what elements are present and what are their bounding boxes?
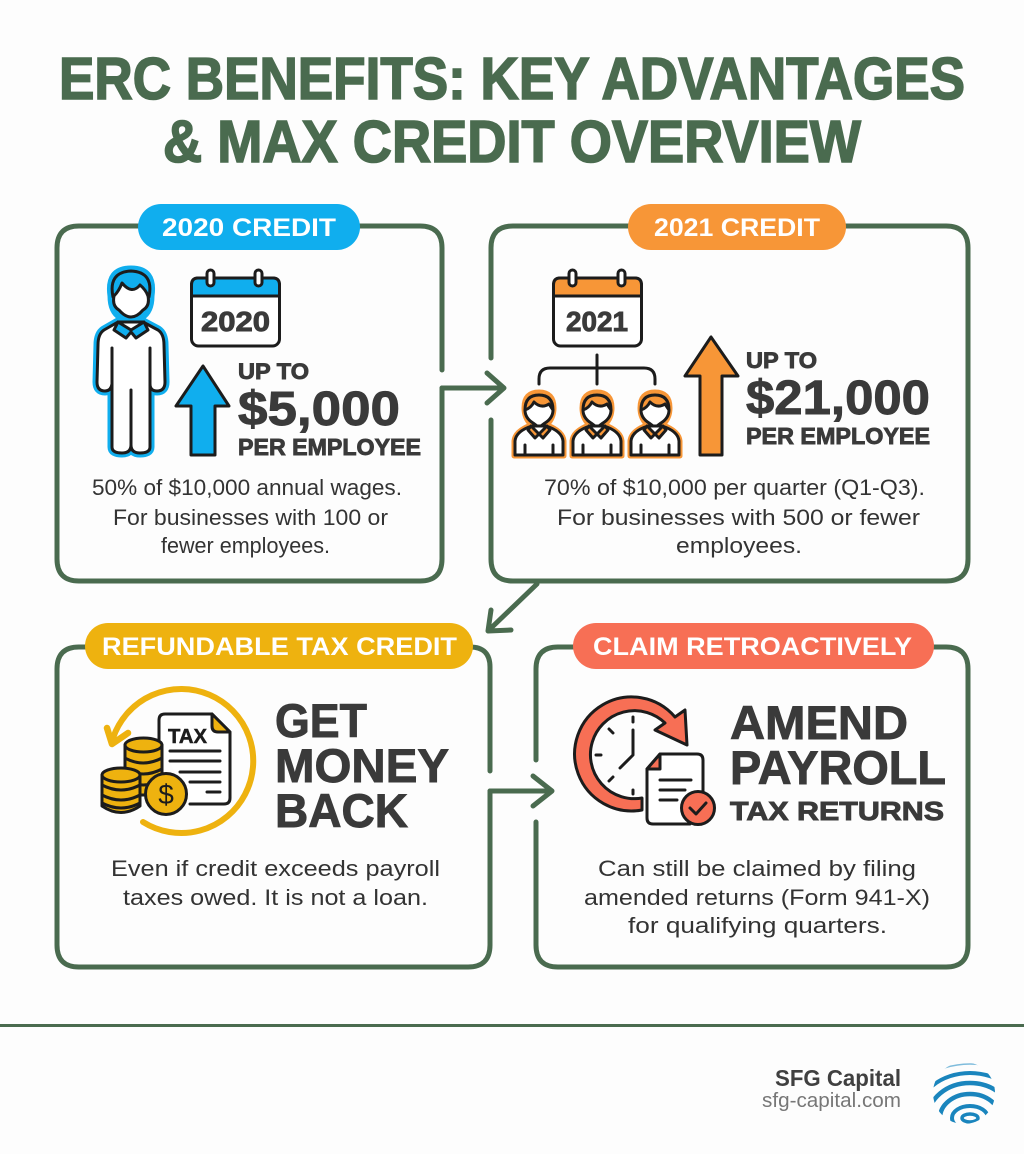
text block: 2020 description: For businesses with 100 or [113, 505, 389, 530]
logo: globe [933, 1063, 995, 1124]
badge: 2020 credit [138, 204, 360, 250]
headline: get money back: GET [275, 694, 367, 747]
headline: amend payroll tax returns: AMEND [730, 696, 908, 749]
headline: get money back: BACK [275, 784, 408, 837]
icon: up arrow [176, 366, 229, 455]
headline: amend payroll tax returns [730, 696, 946, 826]
badge: 2020 credit: 2020 CREDIT [162, 214, 336, 242]
icon: calendar 2020 [192, 270, 280, 346]
text block: retroactive description: Can still be claimed by filing [598, 856, 916, 881]
badge: refundable tax credit: REFUNDABLE TAX CREDIT [102, 633, 457, 661]
icon: tax refund: $ [158, 779, 174, 810]
headline: get money back: MONEY [275, 739, 449, 792]
panel: claim retroactively [536, 623, 968, 967]
panel: 2020 credit [57, 204, 442, 581]
text block: 2021 description [544, 475, 925, 558]
amount: up to $5,000 per employee: $5,000 [238, 383, 400, 436]
panel: refundable tax credit [57, 623, 490, 967]
arrow: refundable to claim retroactively [490, 776, 552, 806]
headline: get money back [275, 694, 449, 837]
amount: up to $5,000 per employee: PER EMPLOYEE [238, 434, 421, 460]
amount: up to $21,000 per employee: $21,000 [746, 372, 930, 425]
arrow: 2021 to refundable [488, 584, 537, 631]
text block: 2021 description: employees. [676, 533, 802, 558]
badge: claim retroactively [573, 623, 934, 669]
badge: 2021 credit [628, 204, 846, 250]
icon: calendar 2021: 2021 [566, 306, 628, 337]
text block: 2020 description [92, 475, 402, 558]
text block: retroactive description: amended returns (Form 941-X) [584, 885, 930, 910]
icon: tax refund: TAX [168, 726, 208, 748]
badge: refundable tax credit [85, 623, 473, 669]
footer: company name: sfg-capital.com [762, 1090, 901, 1112]
icon: calendar 2021 [554, 270, 642, 346]
title [59, 46, 965, 175]
badge: claim retroactively: CLAIM RETROACTIVELY [593, 633, 912, 661]
amount: up to $5,000 per employee [238, 359, 421, 460]
icon: three employees [514, 392, 680, 456]
icon: employee [97, 268, 165, 453]
icon: tax refund [102, 689, 253, 833]
icon: org tree [539, 355, 655, 384]
amount: up to $21,000 per employee: PER EMPLOYEE [746, 423, 930, 449]
arrow: 2020 to 2021 [442, 373, 504, 403]
text block: 2020 description: 50% of $10,000 annual wages. [92, 475, 402, 500]
badge: 2021 credit: 2021 CREDIT [654, 214, 820, 242]
title: & MAX CREDIT OVERVIEW [163, 109, 861, 175]
headline: amend payroll tax returns: TAX RETURNS [730, 796, 944, 826]
footer: company name [762, 1065, 901, 1112]
icon: clock and amended return [575, 697, 714, 824]
amount: up to $21,000 per employee [746, 348, 930, 449]
text block: refundable description [111, 856, 440, 910]
text block: retroactive description: for qualifying quarters. [628, 913, 887, 938]
text block: refundable description: Even if credit exceeds payroll [111, 856, 440, 881]
headline: amend payroll tax returns: PAYROLL [730, 741, 946, 794]
amount: up to $5,000 per employee: UP TO [238, 359, 309, 384]
text block: 2021 description: 70% of $10,000 per quarter (Q1-Q3). [544, 475, 925, 500]
amount: up to $21,000 per employee: UP TO [746, 348, 817, 373]
text block: retroactive description [584, 856, 930, 938]
text block: 2021 description: For businesses with 500 or fewer [557, 505, 921, 530]
icon: up arrow [685, 337, 738, 455]
icon: calendar 2020: 2020 [201, 306, 270, 337]
footer: company name: SFG Capital [775, 1065, 901, 1091]
text block: 2020 description: fewer employees. [161, 533, 330, 558]
text block: refundable description: taxes owed. It is not a loan. [123, 885, 428, 910]
panel: 2021 credit [491, 204, 968, 581]
